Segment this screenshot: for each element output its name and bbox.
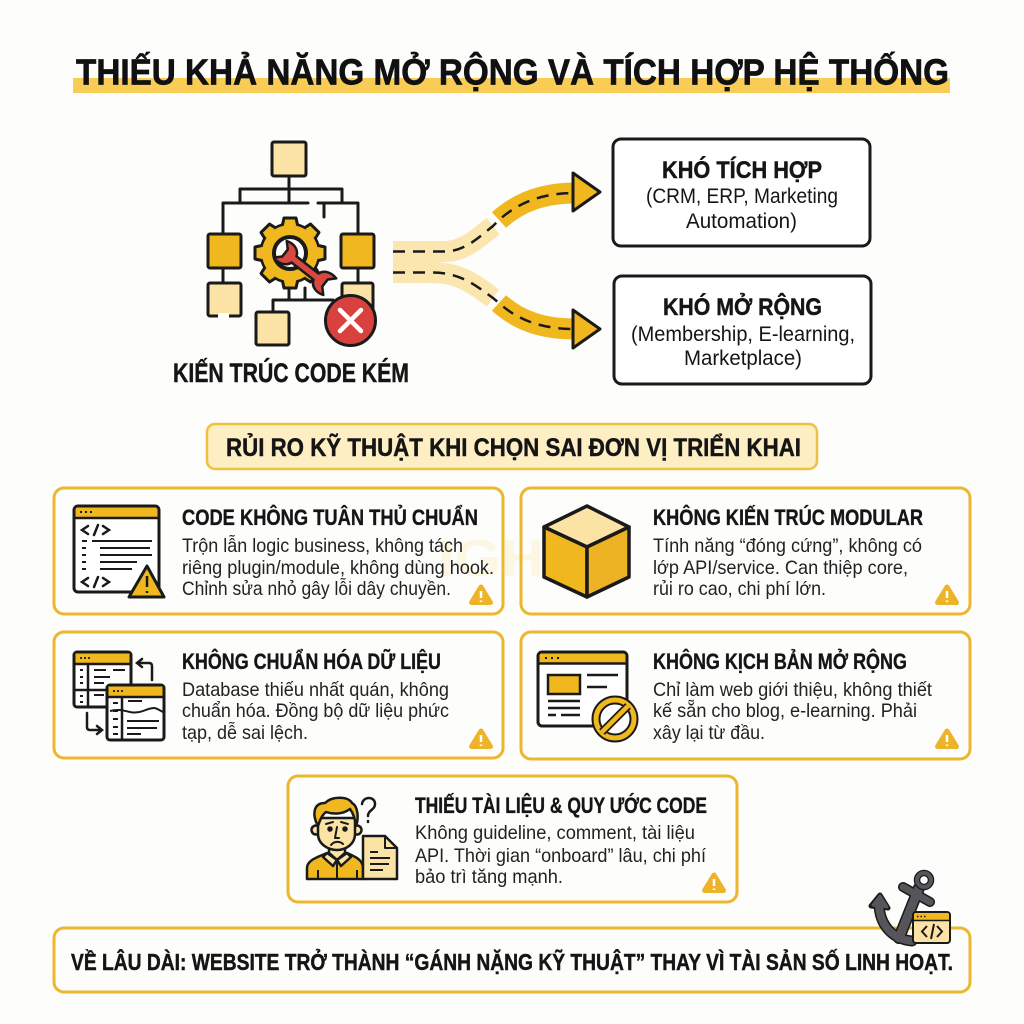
icon: warning: [938, 587, 956, 602]
panel: hard to scale: KHÓ MỞ RỘNG: [663, 292, 822, 321]
arrow: lower path: [393, 272, 600, 348]
icon: code window with warning: [74, 506, 164, 597]
panel: hard to scale: Marketplace): [684, 347, 802, 370]
panel: hard to integrate: Automation): [686, 210, 797, 233]
panel: non-standard code: [54, 488, 503, 614]
card heading: KHÔNG KỊCH BẢN MỞ RỘNG: [653, 649, 907, 674]
title: THIẾU KHẢ NĂNG MỞ RỘNG VÀ TÍCH HỢP HỆ THỐNG: [76, 50, 949, 92]
card heading: KHÔNG KIẾN TRÚC MODULAR: [653, 505, 923, 530]
panel: non-normalized data: [54, 632, 503, 758]
card text: Không guideline, comment, tài liệu: [415, 822, 695, 844]
card text: Trộn lẫn logic business, không tách: [182, 534, 463, 557]
panel: hard to scale: [614, 276, 871, 384]
card text: bảo trì tăng mạnh.: [415, 866, 563, 888]
card text: xây lại từ đầu.: [653, 722, 765, 744]
card text: kế sẵn cho blog, e-learning. Phải: [653, 699, 917, 722]
icon: warning: [704, 875, 724, 890]
section heading: RỦI RO KỸ THUẬT KHI CHỌN SAI ĐƠN VỊ TRIỂN KHAI: [226, 432, 801, 462]
card text: API. Thời gian “onboard” lâu, chi phí: [415, 845, 707, 867]
panel: hard to integrate: (CRM, ERP, Marketing: [646, 185, 838, 208]
panel: hard to integrate: [613, 139, 870, 246]
icon: gear: [255, 218, 325, 288]
section heading: [207, 424, 817, 469]
card text: [182, 534, 494, 600]
card heading: KHÔNG CHUẨN HÓA DỮ LIỆU: [182, 649, 441, 674]
card text: tạp, dễ sai lệch.: [182, 721, 308, 744]
card text: rủi ro cao, chi phí lớn.: [653, 578, 826, 600]
card heading: CODE KHÔNG TUÂN THỦ CHUẨN: [182, 505, 478, 530]
arrow: upper path: [393, 173, 600, 252]
faint background watermark: IGH: [438, 530, 544, 588]
card text: lớp API/service. Can thiệp core,: [653, 557, 908, 579]
diagram: poor code architecture: [173, 142, 409, 388]
card text: [415, 822, 707, 888]
card text: Chỉnh sửa nhỏ gây lỗi dây chuyền.: [182, 577, 451, 600]
card text: chuẩn hóa. Đồng bộ dữ liệu phức: [182, 700, 449, 722]
icon: confused developer with document: [307, 798, 397, 879]
panel: hard to scale: (Membership, E-learning,: [631, 323, 855, 346]
card text: riêng plugin/module, không dùng hook.: [182, 557, 494, 579]
card text: Chỉ làm web giới thiệu, không thiết: [653, 679, 933, 701]
card text: Tính năng “đóng cứng”, không có: [653, 535, 922, 557]
icon: wrench: [273, 240, 337, 296]
card text: [653, 535, 922, 600]
conclusion banner: [54, 928, 970, 992]
panel: no modular architecture: [521, 488, 970, 614]
panel: no expansion scenario: [521, 632, 970, 759]
card heading: THIẾU TÀI LIỆU & QUY ƯỚC CODE: [415, 793, 707, 818]
icon: anchor with code window: [871, 873, 950, 943]
diagram label: KIẾN TRÚC CODE KÉM: [173, 357, 409, 388]
icon: cube: [544, 506, 629, 597]
icon: web page with prohibited sign: [538, 652, 634, 738]
card text: [182, 679, 449, 744]
icon: warning: [472, 731, 490, 746]
icon: warning: [472, 587, 490, 602]
icon: red error badge: [326, 296, 376, 346]
icon: data tables: [74, 652, 164, 740]
icon: warning: [938, 731, 956, 746]
panel: missing documentation: [288, 776, 737, 902]
panel: hard to integrate: KHÓ TÍCH HỢP: [662, 156, 822, 184]
card text: [653, 679, 933, 744]
card text: Database thiếu nhất quán, không: [182, 679, 449, 701]
